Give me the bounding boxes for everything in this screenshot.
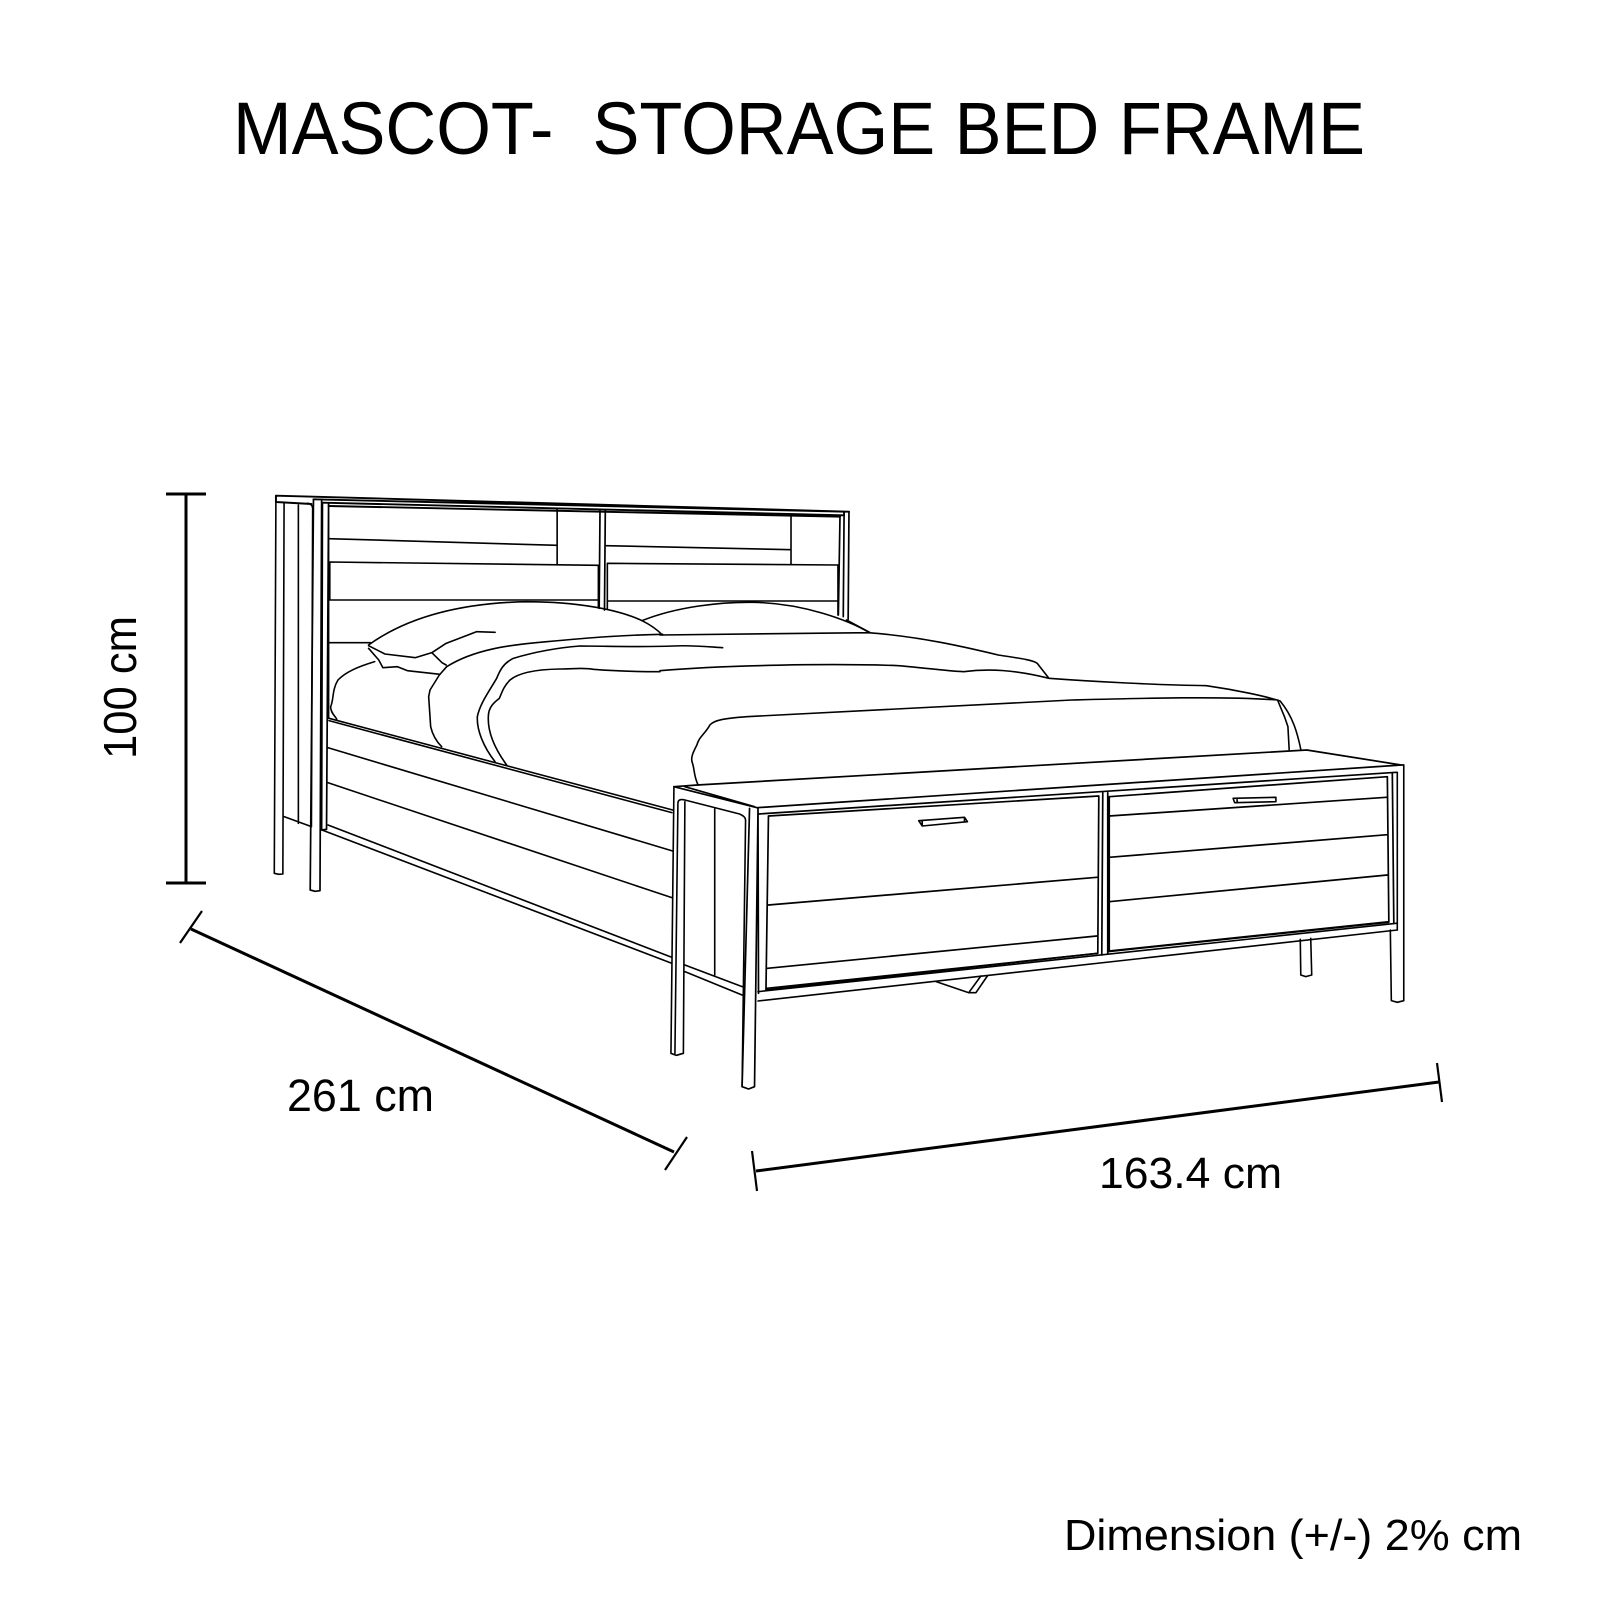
centre post [1102, 793, 1108, 955]
top rail [276, 496, 849, 517]
drawer panel right [1109, 773, 1394, 951]
handle left [919, 817, 967, 826]
centre and right posts [599, 511, 849, 619]
lower side rail [322, 825, 671, 963]
front right leg [1390, 765, 1404, 1002]
side rails [328, 718, 673, 898]
dimension line: length [180, 911, 687, 1170]
side panel and rear leg [671, 787, 746, 1087]
right pillow [642, 602, 869, 633]
length label: 261 cm [287, 1070, 434, 1121]
left outer post [274, 496, 313, 874]
headboard slats right [606, 516, 838, 615]
handle right [1233, 797, 1276, 803]
centre support [936, 976, 987, 993]
storage footboard [671, 750, 1404, 1089]
front left leg [742, 808, 759, 1089]
title: MASCOT- STORAGE BED FRAME [233, 87, 1365, 170]
height label: 100 cm [94, 616, 146, 759]
bed line drawing [274, 496, 1404, 1089]
dimension line: width [752, 1063, 1442, 1191]
lower front rail [758, 922, 1397, 1001]
footboard top [674, 750, 1404, 814]
left inner post [310, 499, 329, 891]
headboard and side rails [274, 496, 869, 898]
dimension line: height [166, 494, 206, 883]
tolerance note: Dimension (+/-) 2% cm [1064, 1511, 1522, 1560]
left pillow [369, 602, 662, 674]
headboard slats left [329, 509, 598, 643]
duvet fold [429, 634, 723, 765]
duvet and mattress foot [660, 620, 1301, 785]
back leg [1300, 938, 1312, 977]
drawer panel left [766, 796, 1099, 990]
width label: 163.4 cm [1099, 1149, 1282, 1198]
mattress head end [331, 662, 375, 719]
